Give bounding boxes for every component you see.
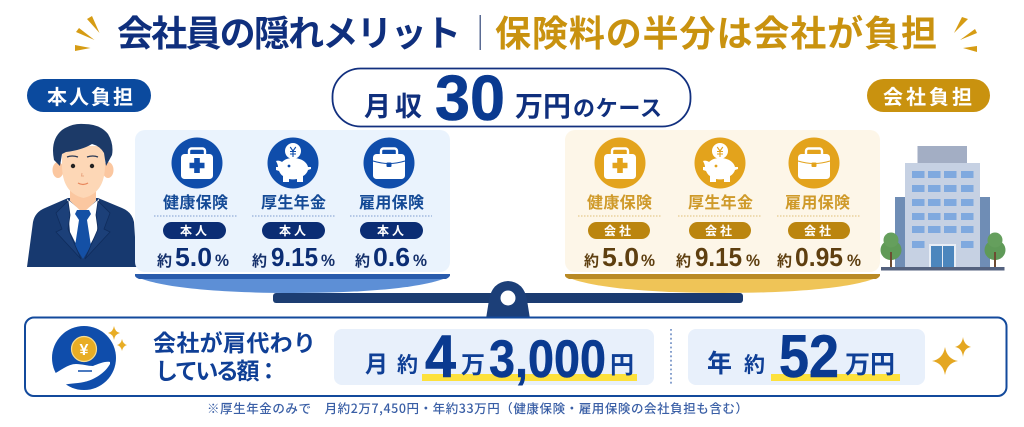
panel: employee share: [135, 130, 450, 272]
label: [153, 324, 316, 386]
item: pension: [252, 138, 335, 272]
item: employment insurance: %: [413, 251, 427, 270]
monthly amount: 約: [397, 349, 418, 379]
item: pension: %: [321, 251, 335, 270]
item: employment insurance: 本人: [377, 222, 407, 239]
monthly amount: 3,000: [489, 330, 606, 389]
icon: sparkles: [932, 337, 971, 375]
item: health insurance: 約: [584, 250, 599, 271]
monthly amount: 月: [365, 345, 388, 379]
label: 会社が肩代わり: [153, 324, 316, 358]
monthly income pill: のケース: [573, 91, 662, 123]
item: pension: 厚生年金: [688, 189, 753, 213]
monthly income pill: 月収: [364, 85, 422, 124]
yearly amount: 約: [744, 349, 765, 379]
item: health insurance: %: [215, 251, 229, 270]
item: employment insurance: [777, 138, 861, 272]
badge: employee share: [27, 79, 151, 112]
seesaw fulcrum: [485, 281, 531, 325]
seesaw plate: employee: [135, 274, 450, 293]
seesaw plate: company: [565, 274, 880, 293]
item: pension: 会社: [705, 222, 735, 239]
item: health insurance: 健康保険: [587, 189, 652, 213]
monthly income pill: 30: [435, 62, 505, 134]
badge: employee share: 本人負担: [47, 81, 133, 110]
item: health insurance: 約: [157, 250, 172, 271]
item: health insurance: %: [641, 251, 655, 270]
icon: left burst: [75, 16, 100, 51]
yearly amount: 52: [779, 323, 839, 390]
icon: hand with yen coin: ¥: [80, 342, 89, 359]
seesaw beam: [273, 293, 743, 303]
item: employment insurance: 会社: [804, 222, 834, 239]
item: pension: 9.15: [695, 242, 742, 272]
item: pension: 本人: [279, 222, 309, 239]
item: employment insurance: [350, 138, 432, 272]
panel: company share: [565, 130, 880, 272]
icon: office building: [880, 146, 1006, 270]
item: employment insurance: 0.6: [373, 242, 410, 272]
item: pension: 約: [252, 250, 267, 271]
monthly amount: 4: [425, 323, 457, 390]
monthly amount: 万: [461, 345, 485, 380]
item: health insurance: [154, 138, 238, 272]
monthly income pill: 万円: [515, 85, 571, 125]
monthly income pill: [332, 62, 690, 134]
item: health insurance: [578, 138, 661, 272]
icon: businessman: [27, 124, 137, 267]
item: health insurance: 健康保険: [163, 189, 228, 213]
footnote: ※厚生年金のみで 月約2万7,450円・年約33万円（健康保険・雇用保険の会社負担も含む）: [207, 398, 748, 417]
item: health insurance: 5.0: [175, 242, 212, 272]
title: left part: 会社員の隠れメリット: [117, 5, 461, 57]
item: employment insurance: 0.95: [795, 242, 843, 272]
panel: summary: [25, 318, 1006, 396]
icon: hand with yen coin: [52, 326, 127, 390]
title: right part: 保険料の半分は会社が負担: [495, 5, 937, 57]
item: employment insurance: 雇用保険: [359, 189, 424, 213]
item: employment insurance: 約: [777, 250, 792, 271]
item: health insurance: 会社: [604, 222, 634, 239]
item: pension: [676, 138, 762, 272]
item: health insurance: 本人: [180, 222, 210, 239]
badge: company share: [867, 79, 990, 112]
item: pension: 9.15: [271, 242, 318, 272]
item: employment insurance: 雇用保険: [785, 189, 850, 213]
item: pension: 厚生年金: [261, 189, 326, 213]
yearly amount: 年: [707, 344, 732, 380]
icon: right burst: [954, 17, 977, 52]
title: [75, 5, 977, 57]
monthly amount: 円: [610, 345, 634, 380]
label: している額：: [155, 352, 280, 386]
item: health insurance: 5.0: [602, 242, 639, 272]
item: pension: 約: [676, 250, 691, 271]
item: pension: %: [746, 251, 760, 270]
yearly amount: 万円: [845, 345, 895, 381]
badge: company share: 会社負担: [883, 81, 972, 110]
item: employment insurance: 約: [355, 250, 370, 271]
yearly amount: [688, 323, 925, 390]
monthly amount: [334, 323, 654, 390]
item: employment insurance: %: [847, 251, 861, 270]
